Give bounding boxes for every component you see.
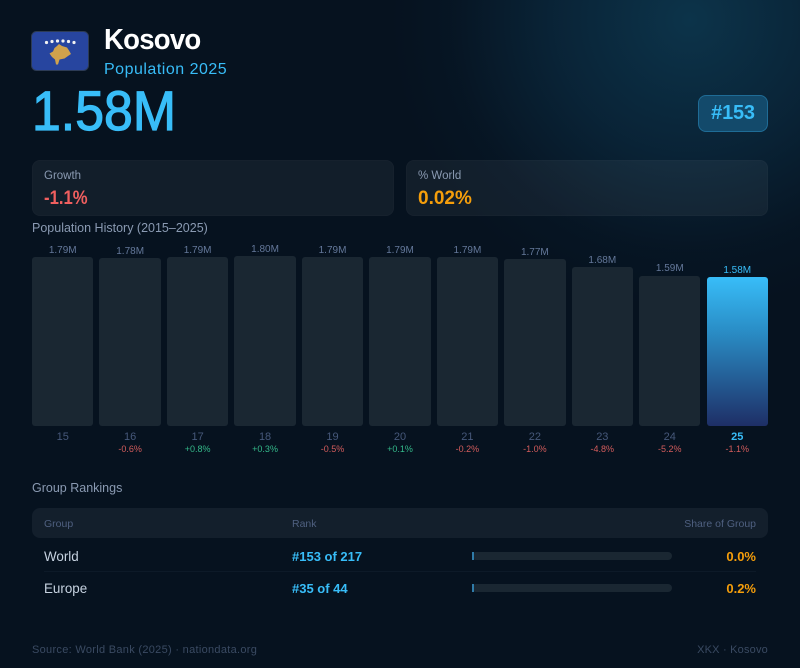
row: World: World xyxy=(44,549,79,564)
bar 2016 xyxy=(99,246,161,454)
row: Europe xyxy=(44,581,756,596)
bar 2021: 21 xyxy=(461,431,474,443)
world share label: % World xyxy=(418,170,461,182)
bar 2020: 20 xyxy=(394,431,406,443)
world share value: 0.02% xyxy=(418,188,472,209)
bar 2023: 23 xyxy=(596,431,608,443)
bar 2019 xyxy=(302,245,363,454)
bar 2022 xyxy=(504,247,566,454)
growth label: Growth xyxy=(44,170,81,182)
row: World xyxy=(44,549,756,564)
footer country code: XKX · Kosovo xyxy=(697,644,768,656)
row: World: 0.0% xyxy=(726,549,756,564)
bar 2023: -4.8% xyxy=(591,444,614,454)
bar 2017: 1.79M xyxy=(184,245,212,256)
panel: growth stat xyxy=(32,160,394,216)
bar 2023: 1.68M xyxy=(588,255,616,266)
bar 2025 highlighted: 1.58M xyxy=(723,265,751,276)
row: World: #153 of 217 xyxy=(292,549,362,564)
bar 2019: 1.79M xyxy=(319,245,346,256)
bar 2019: 19 xyxy=(326,431,339,443)
rank badge xyxy=(698,95,768,132)
section heading: group rankings: Group Rankings xyxy=(32,481,122,495)
bar 2021: 1.79M xyxy=(454,245,481,256)
table header xyxy=(32,508,768,538)
table header: Rank xyxy=(292,518,317,530)
bar 2024: 1.59M xyxy=(656,263,684,274)
panel: world share stat xyxy=(406,160,768,216)
row: Europe: Europe xyxy=(44,581,87,596)
bar chart: population history xyxy=(32,244,768,454)
bar 2015 xyxy=(32,245,93,443)
bar 2025 highlighted xyxy=(707,265,768,454)
progress bar: Europe share xyxy=(472,584,672,592)
bar 2022: -1.0% xyxy=(523,444,547,454)
bar 2024: -5.2% xyxy=(658,444,682,454)
bar 2025 highlighted: 25 xyxy=(731,431,743,443)
bar 2024 xyxy=(639,263,700,454)
bar 2024: 24 xyxy=(664,431,676,443)
bar 2021: -0.2% xyxy=(456,444,479,454)
rank badge: #153 xyxy=(711,102,755,124)
bar 2016: 1.78M xyxy=(116,246,144,257)
bar 2022: 22 xyxy=(529,431,541,443)
progress bar: World share xyxy=(472,552,672,560)
growth value: -1.1% xyxy=(44,188,88,209)
bar 2017: 17 xyxy=(191,431,204,443)
bar 2020: 1.79M xyxy=(386,245,414,256)
table header: Share of Group xyxy=(684,518,756,530)
bar 2025 highlighted: -1.1% xyxy=(725,444,749,454)
bar 2021 xyxy=(437,245,498,454)
bar 2020 xyxy=(369,245,431,454)
bar 2023 xyxy=(572,255,633,454)
bar 2017 xyxy=(167,245,228,454)
bar 2015: 15 xyxy=(57,431,69,443)
bar 2019: -0.5% xyxy=(321,444,344,454)
row divider xyxy=(44,571,756,572)
headline population value: 1.58M xyxy=(32,79,176,142)
bar 2022: 1.77M xyxy=(521,247,549,258)
table: group rankings xyxy=(32,508,768,538)
bar 2018: 1.80M xyxy=(251,244,279,255)
row: Europe: 0.2% xyxy=(726,581,756,596)
title: Kosovo xyxy=(104,24,200,56)
chart heading: Population History (2015–2025) xyxy=(32,221,208,235)
bar 2018: 18 xyxy=(259,431,271,443)
bar 2016: 16 xyxy=(124,431,136,443)
row: Europe: #35 of 44 xyxy=(292,581,348,596)
table header: Group xyxy=(44,518,73,530)
bar 2020: +0.1% xyxy=(387,444,413,454)
bar 2018 xyxy=(234,244,296,454)
bar 2017: +0.8% xyxy=(185,444,210,454)
bar 2018: +0.3% xyxy=(252,444,278,454)
icon: flag of Kosovo xyxy=(31,31,89,71)
bar 2016: -0.6% xyxy=(118,444,142,454)
subtitle: Population 2025 xyxy=(104,61,227,78)
footer source: Source: World Bank (2025) · nationdata.org xyxy=(32,644,257,656)
bar 2015: 1.79M xyxy=(49,245,77,256)
